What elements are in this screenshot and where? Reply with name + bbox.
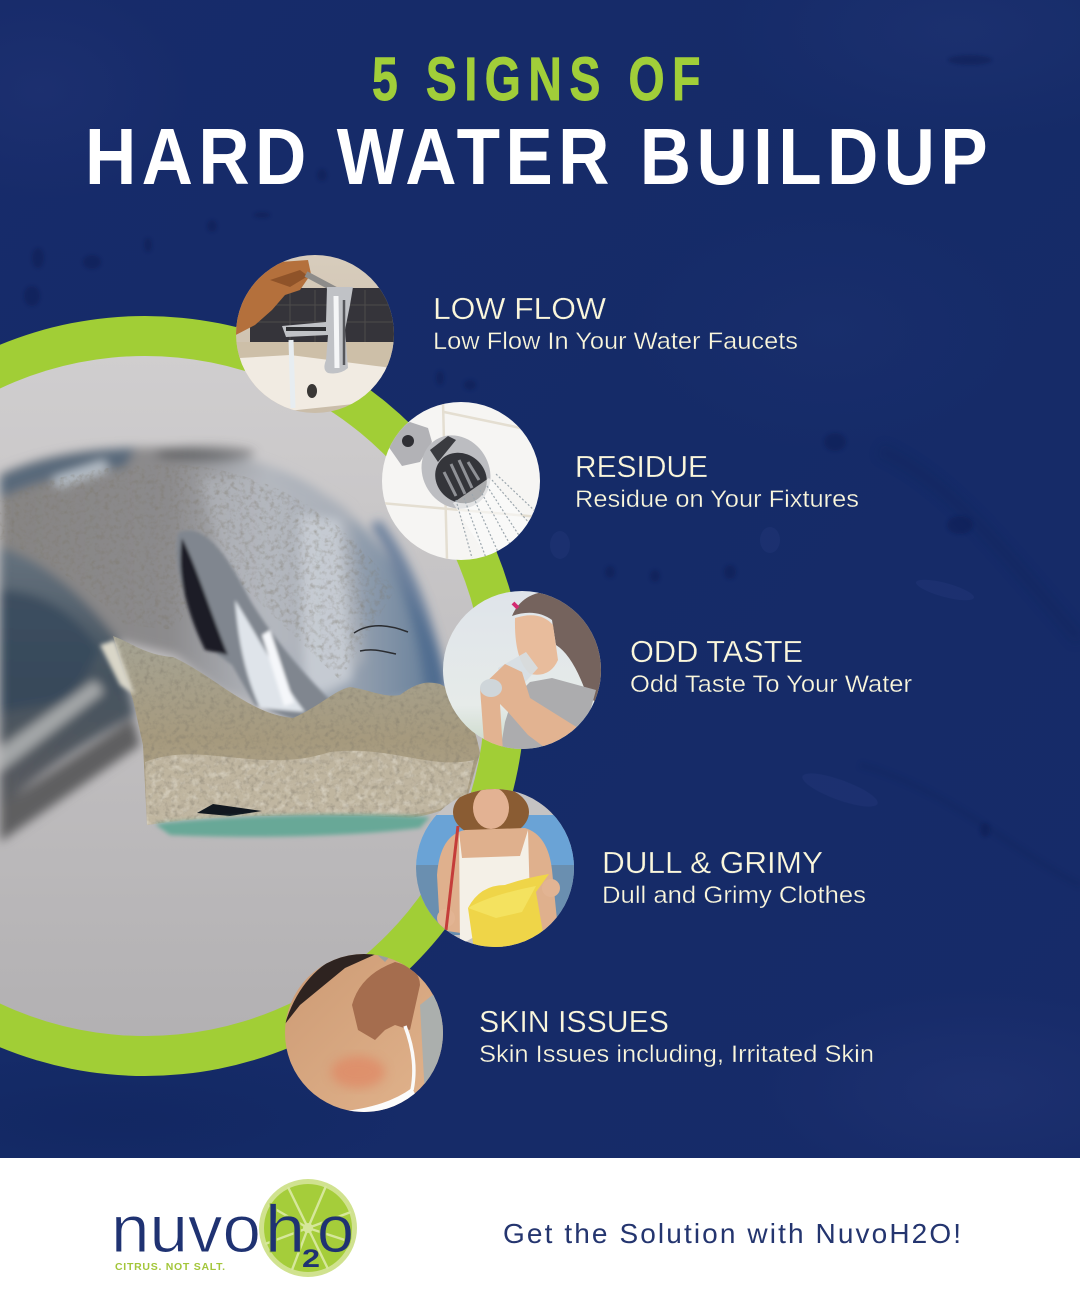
photo 5: irritated skin on back xyxy=(282,950,447,1115)
chrome highlight band xyxy=(177,531,335,720)
photo 3: girl drinking water xyxy=(443,591,601,749)
wordmark h2o xyxy=(265,1192,354,1273)
sign 5 description: Skin Issues including, Irritated Skin xyxy=(479,1041,874,1068)
call to action: Get the Solution with NuvoH2O! xyxy=(503,1218,961,1249)
sign 3 description: Odd Taste To Your Water xyxy=(630,671,912,698)
casing speckle xyxy=(0,464,395,680)
photo 1: bathroom faucet xyxy=(236,255,394,413)
wordmark h2o: o xyxy=(317,1192,354,1267)
limescale deposit xyxy=(100,636,480,837)
sign 3 heading: ODD TASTE xyxy=(630,634,803,669)
sign 5 text xyxy=(479,1004,874,1068)
green ring xyxy=(0,316,525,1076)
wordmark nuvo: nuvo xyxy=(111,1192,261,1267)
sign 1 text xyxy=(433,291,798,355)
faucet casing xyxy=(0,447,448,722)
sign 2 description: Residue on Your Fixtures xyxy=(575,486,859,513)
sign 2 heading: RESIDUE xyxy=(575,449,708,484)
wordmark h2o: 2 xyxy=(302,1245,320,1273)
sign 3 text xyxy=(630,634,912,698)
main photo: faucet with scale buildup xyxy=(0,350,500,1050)
sign 4 description: Dull and Grimy Clothes xyxy=(602,882,866,909)
sign 1 heading: LOW FLOW xyxy=(433,291,607,326)
sign 2 text xyxy=(575,449,859,513)
wordmark h2o: h xyxy=(265,1192,305,1267)
title line 2: HARD WATER BUILDUP xyxy=(85,112,993,201)
logo: NuvoH2O xyxy=(111,1179,357,1277)
sign 5 heading: SKIN ISSUES xyxy=(479,1004,669,1039)
photo 4: woman checking yellow shirt xyxy=(414,785,579,950)
title xyxy=(85,45,993,201)
title line 1: 5 SIGNS OF xyxy=(372,45,708,113)
logo tagline: CITRUS. NOT SALT. xyxy=(115,1261,225,1273)
icon: lime slice xyxy=(259,1179,357,1277)
sign 4 heading: DULL & GRIMY xyxy=(602,845,823,880)
footer band xyxy=(0,1158,1080,1300)
sign 1 description: Low Flow In Your Water Faucets xyxy=(433,328,798,355)
sign 4 text xyxy=(602,845,866,909)
photo 2: shower head xyxy=(380,400,540,564)
